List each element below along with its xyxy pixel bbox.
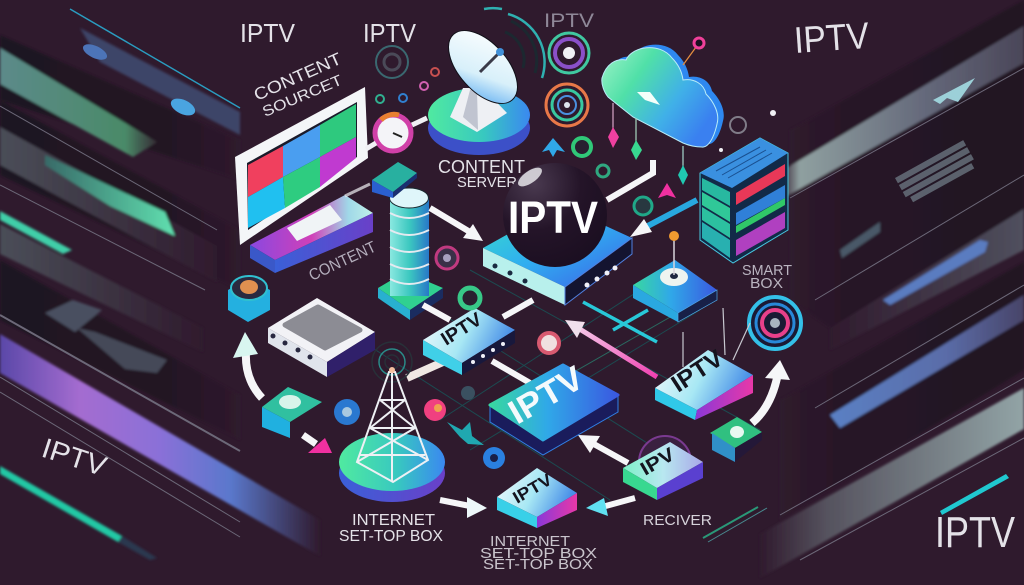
- label: content source: [251, 49, 345, 121]
- satellite dish: [428, 8, 545, 191]
- receiver box: [623, 436, 703, 500]
- icon: pink up arrow: [658, 183, 676, 198]
- accent bar above bottom right IPTV: [940, 474, 1009, 515]
- arrow: receiver to panel: [578, 435, 628, 463]
- label: IPTV top 2: IPTV: [363, 18, 417, 48]
- label: content server: CONTENT: [438, 157, 525, 177]
- label: IPTV set-top: IPTV: [510, 470, 556, 507]
- set-top box: [497, 468, 577, 528]
- connector: router to panel: [492, 361, 530, 383]
- IPTV small router: [423, 308, 515, 375]
- arrow: cyan cross: [583, 302, 657, 342]
- label: content source: CONTENT: [251, 49, 345, 105]
- smart box device: [633, 231, 792, 322]
- label: internet set-top box: SET-TOP BOX: [339, 528, 443, 545]
- label: content server: [438, 157, 525, 191]
- label: IPTV receiver: IPV: [637, 444, 679, 480]
- cloud: [602, 38, 724, 185]
- label: content server: SERVER: [457, 174, 517, 191]
- label: content source: SOURCET: [260, 72, 345, 121]
- white router: [268, 298, 375, 377]
- icon: ring right: [749, 297, 801, 349]
- arrow: left loop: [233, 332, 262, 398]
- icon: ring top: [549, 33, 589, 73]
- keyboard: [895, 140, 978, 204]
- connector: monitor to dish: [345, 118, 427, 196]
- icon: ring center: [546, 84, 588, 126]
- icon: green hex: [262, 387, 322, 438]
- concentric ring icons: [376, 33, 801, 349]
- connector: router to lattice tower: [407, 362, 443, 378]
- label: internet set-top box: INTERNET: [352, 512, 435, 529]
- icon: green box lower right: [710, 417, 762, 462]
- icon: gauge: [375, 114, 411, 151]
- label: IPTV top left: IPTV: [240, 18, 296, 48]
- arrow: pink head: [303, 435, 332, 453]
- label: internet set-top box lower: SET-TOP BOX: [480, 545, 597, 562]
- central IPTV hub: [483, 163, 632, 305]
- arrow: tower to set-top: [440, 497, 487, 518]
- label: IPTV hub: IPTV: [508, 192, 598, 243]
- lattice tower: [339, 342, 445, 502]
- icon: small box: [372, 162, 417, 198]
- label: internet set-top box: [339, 512, 443, 545]
- label: IPTV top right: IPTV: [793, 15, 871, 61]
- floor grid: [360, 270, 760, 500]
- small nodes: [262, 247, 762, 469]
- icon: blue up arrow: [542, 138, 565, 157]
- icon: dim ring top: [376, 46, 408, 78]
- label: IPTV top 3: IPTV: [544, 11, 594, 32]
- label: smart box: [742, 262, 792, 292]
- label: IPTV bottom left: IPTV: [38, 432, 111, 482]
- icon: left cube: [228, 276, 270, 322]
- arrows: [233, 160, 790, 518]
- label: internet set-top box lower: [480, 533, 597, 573]
- arrow: server to hub: [630, 200, 697, 237]
- arrow: right loop: [752, 360, 790, 423]
- monitor: content source: [235, 49, 379, 285]
- IPTV large panel: [490, 359, 618, 455]
- arrow: tower to hub: [430, 208, 483, 241]
- label: smart box: SMART: [742, 262, 792, 279]
- server rack: [700, 138, 788, 263]
- connector: hub to router: [503, 300, 533, 317]
- IPTV right device: [655, 308, 753, 420]
- label: internet set-top box lower: SET-TOP BOX: [483, 556, 593, 573]
- label: IPTV panel: IPTV: [502, 359, 591, 432]
- label: internet set-top box lower: INTERNET: [490, 533, 570, 550]
- tower cylinder: [378, 188, 443, 320]
- label: IPTV router: IPTV: [438, 309, 486, 350]
- icon: white dots: [719, 110, 776, 152]
- label: IPTV right device: IPTV: [667, 345, 728, 398]
- label: receiver: RECIVER: [643, 512, 712, 529]
- label: smart box: BOX: [750, 275, 783, 292]
- arrow: receiver to set-top: [586, 498, 635, 516]
- label: content: CONTENT: [307, 239, 379, 285]
- icon: teal swoosh: [447, 422, 484, 445]
- icon: background arrow: [933, 78, 975, 104]
- connector: router left: [423, 305, 450, 320]
- arrow: cloud to hub: [607, 160, 653, 200]
- arrow: pink link: [565, 320, 657, 377]
- icon: small rings: [376, 68, 746, 215]
